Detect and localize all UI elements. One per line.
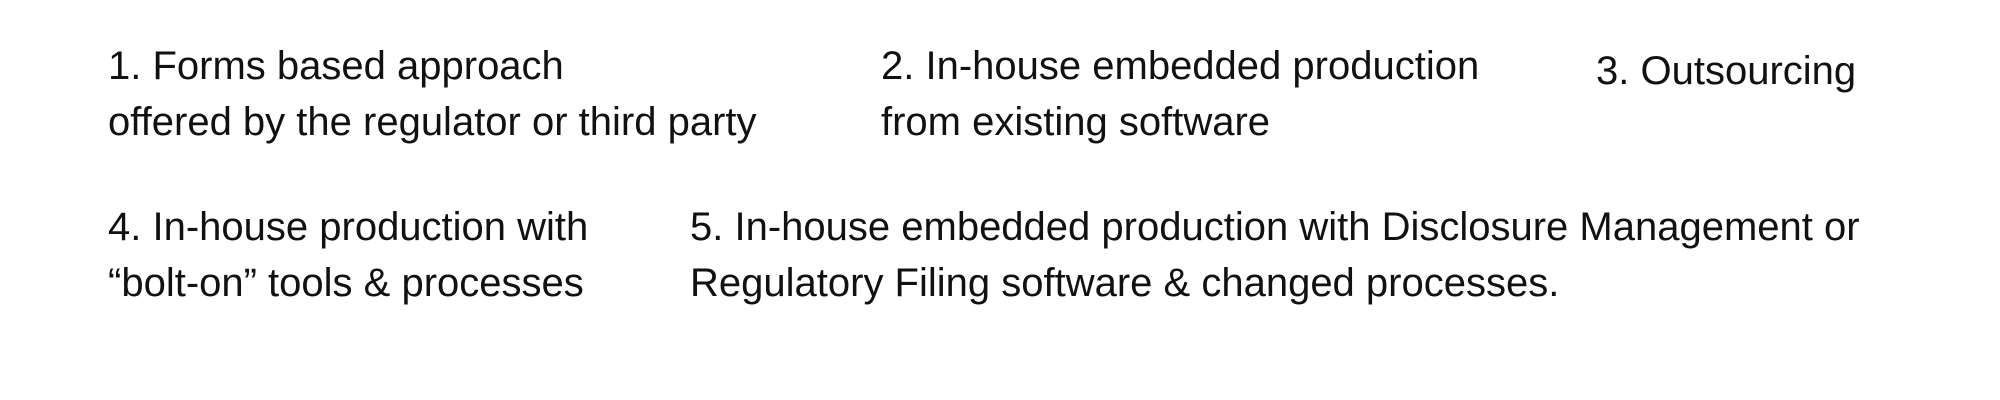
text block: item 4 bolt-on tools: [108, 205, 588, 305]
text block: item 2 in-house embedded production: 2. In-house embedded production: [881, 44, 1479, 88]
text block: item 2 in-house embedded production: [881, 44, 1479, 144]
text block: item 2 in-house embedded production: from existing software: [881, 100, 1270, 144]
text block: item 5 disclosure management: [690, 205, 1860, 305]
text block: item 5 disclosure management: 5. In-house embedded production with Disclosure Management or: [690, 205, 1860, 249]
text block: item 4 bolt-on tools: “bolt-on” tools & processes: [108, 261, 584, 305]
text block: item 1 forms based approach: 1. Forms based approach: [108, 44, 564, 88]
text block: item 4 bolt-on tools: 4. In-house production with: [108, 205, 588, 249]
text block: item 5 disclosure management: Regulatory Filing software & changed processes.: [690, 261, 1559, 305]
text block: item 1 forms based approach: [108, 44, 757, 144]
text block: item 3 outsourcing: 3. Outsourcing: [1596, 49, 1856, 93]
text block: item 1 forms based approach: offered by the regulator or third party: [108, 100, 757, 144]
